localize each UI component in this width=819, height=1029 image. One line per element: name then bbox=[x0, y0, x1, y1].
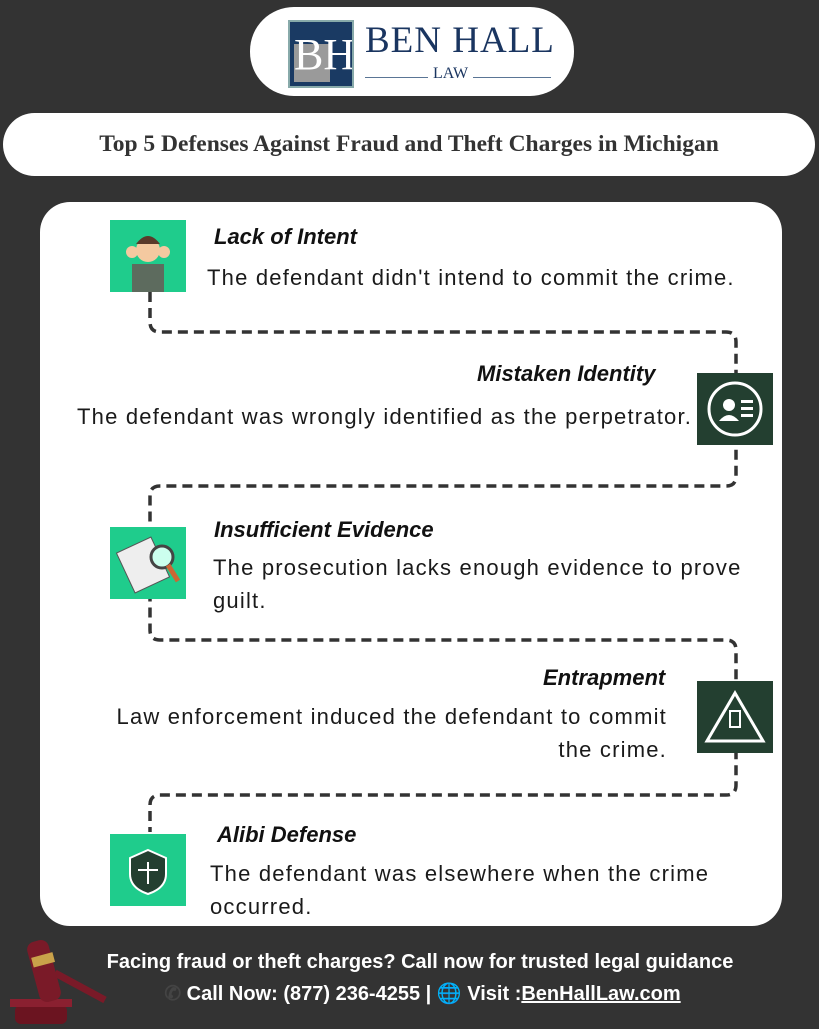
item 2: Mistaken Identity bbox=[477, 361, 655, 386]
logo mark bbox=[288, 20, 354, 88]
icon: warning hand bbox=[697, 681, 773, 753]
text: The defendant was wrongly identified as the perpetrator. bbox=[77, 404, 692, 429]
text: The defendant was elsewhere when the crime occurred. bbox=[210, 861, 709, 919]
item 5: Alibi Defense bbox=[217, 822, 356, 847]
text: The prosecution lacks enough evidence to prove guilt. bbox=[213, 555, 742, 613]
logo pill: LAW bbox=[433, 65, 468, 82]
item 4: Entrapment bbox=[543, 665, 665, 690]
title pill bbox=[3, 113, 815, 176]
footer cta: Facing fraud or theft charges? Call now for trusted legal guidance bbox=[107, 951, 733, 973]
item 3: Insufficient Evidence bbox=[214, 517, 434, 542]
logo pill bbox=[250, 7, 574, 96]
main panel bbox=[40, 202, 782, 926]
icon: stressed person bbox=[110, 220, 186, 292]
icon: id card bbox=[697, 373, 773, 445]
text: Law enforcement induced the defendant to commit the crime. bbox=[117, 704, 667, 762]
icon: shield scales bbox=[110, 834, 186, 906]
logo text: BEN HALL bbox=[365, 20, 555, 61]
title pill: Top 5 Defenses Against Fraud and Theft Charges in Michigan bbox=[99, 131, 719, 157]
logo mark: BH bbox=[294, 30, 354, 79]
item 1: Lack of Intent bbox=[214, 224, 357, 249]
text: The defendant didn't intend to commit the crime. bbox=[207, 265, 735, 290]
icon: gavel bbox=[10, 940, 106, 1024]
icon: magnifier docs bbox=[110, 527, 186, 599]
footer contact: ✆ Call Now: (877) 236-4255 | 🌐 Visit :BenHallLaw.com bbox=[164, 983, 681, 1005]
